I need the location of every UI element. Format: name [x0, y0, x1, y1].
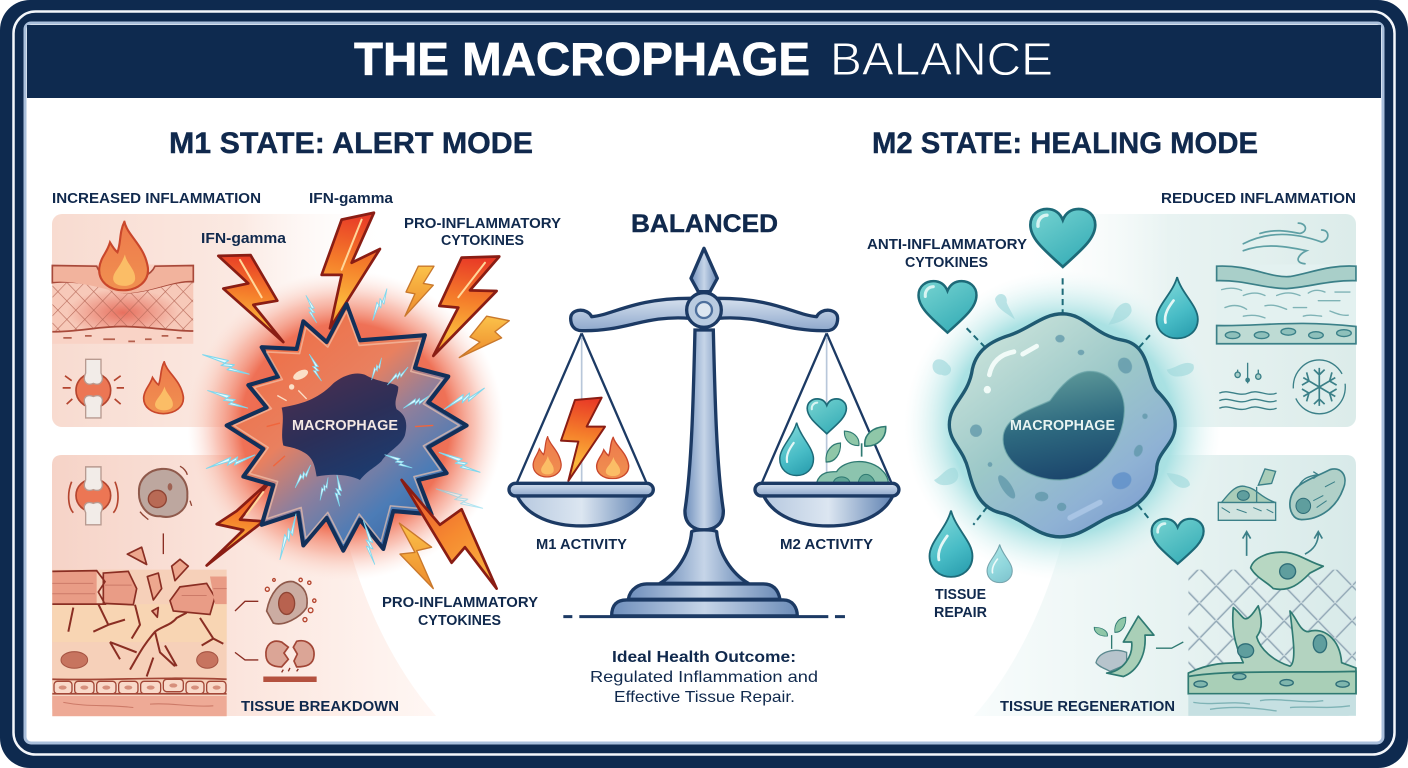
outer sparks — [201, 287, 486, 565]
inner sparks — [293, 353, 430, 506]
bolt: top — [322, 213, 380, 328]
cracked tissue — [52, 533, 227, 716]
beam — [571, 298, 838, 331]
large lightning bolts — [207, 213, 499, 565]
ground line — [563, 612, 845, 621]
right pan — [755, 483, 899, 526]
heading: M2 state: M2 STATE: HEALING MODE — [872, 127, 1258, 160]
panel: tissue breakdown background — [52, 455, 436, 716]
icon: flame — [144, 362, 183, 414]
droplets — [930, 277, 1198, 583]
panel: reduced inflammation background — [1016, 214, 1356, 427]
bolt: upper left — [218, 255, 283, 342]
illustration: scaffold regeneration — [1188, 552, 1356, 716]
icon: M1 pan contents — [533, 398, 629, 481]
illustration: calm tissue with breeze — [1217, 223, 1356, 344]
macrophage glow — [187, 270, 504, 581]
label: pro-inflammatory cytokines bottom: PRO-INFLAMMATORY — [382, 595, 538, 611]
label: pro-inflammatory cytokines bottom — [382, 595, 538, 629]
left illustration set — [52, 213, 509, 716]
heading: M1 state: M1 STATE: ALERT MODE — [169, 127, 533, 160]
icon: sprout with growth arrow — [1094, 616, 1183, 677]
macrophage cell: M2 state — [949, 314, 1175, 537]
base — [612, 530, 797, 616]
icon: damaged joint — [69, 467, 118, 525]
label: anti-inflammatory cytokines — [867, 237, 1027, 271]
label: anti-inflammatory cytokines: CYTOKINES — [905, 255, 988, 271]
label: M1 activity: M1 ACTIVITY — [536, 537, 627, 553]
macrophage glow — [904, 270, 1221, 581]
label: anti-inflammatory cytokines: ANTI-INFLAMMATORY — [867, 237, 1027, 253]
icon: cooling waves — [1219, 363, 1277, 409]
left pan — [509, 483, 653, 526]
text: ideal health outcome — [590, 649, 818, 706]
label: pro-inflammatory cytokines bottom: CYTOKINES — [418, 613, 501, 629]
macrophage cell: spiky M1 state — [227, 304, 467, 551]
label: tissue repair: REPAIR — [934, 605, 988, 621]
label: IFN-gamma left: IFN-gamma — [201, 231, 287, 247]
small yellow bolts — [399, 266, 509, 589]
icon: inflamed joint — [63, 359, 124, 418]
label: increased inflammation: INCREASED INFLAMMATION — [52, 191, 261, 207]
label: tissue repair: TISSUE — [935, 587, 986, 603]
lightning bolt: lower right — [402, 480, 497, 589]
bolt: upper right — [433, 257, 499, 356]
hearts — [919, 209, 1204, 564]
arrows — [1243, 532, 1322, 556]
title banner: THE MACROPHAGE — [354, 33, 810, 85]
hanger lines — [582, 337, 827, 483]
title banner: BALANCE — [830, 33, 1053, 85]
connector dashes — [967, 278, 1150, 525]
spire — [691, 248, 717, 292]
label: pro-inflammatory cytokines top: CYTOKINES — [441, 233, 524, 249]
nucleus — [1003, 371, 1124, 480]
left pan strings — [517, 333, 647, 483]
panel: tissue regeneration background — [974, 455, 1356, 716]
icon: damaged cell — [139, 466, 192, 520]
hub — [687, 293, 721, 327]
icon: stressed cell — [235, 578, 316, 624]
right illustration set — [904, 209, 1356, 716]
text: ideal health outcome: Effective Tissue Repair. — [614, 689, 795, 706]
label: IFN-gamma top: IFN-gamma — [309, 191, 394, 207]
right pan strings — [762, 333, 892, 483]
label: tissue repair — [934, 587, 988, 621]
illustration: cell repair icons — [1218, 469, 1345, 520]
label: pro-inflammatory cytokines top: PRO-INFLAMMATORY — [404, 216, 561, 232]
balance scale — [509, 248, 899, 617]
label: tissue breakdown: TISSUE BREAKDOWN — [241, 699, 399, 715]
column — [685, 330, 723, 530]
text: ideal health outcome: Ideal Health Outcome: — [612, 649, 796, 666]
title banner — [27, 25, 1381, 98]
soft secretion blobs — [933, 294, 1194, 488]
nucleus — [282, 373, 406, 480]
label: macrophage right: MACROPHAGE — [1010, 418, 1115, 434]
bolt highlights — [240, 220, 485, 514]
icon: ruptured cell — [235, 641, 317, 679]
icon: M2 pan contents — [780, 399, 888, 483]
label: tissue regeneration: TISSUE REGENERATION — [1000, 699, 1175, 715]
icon: snowflake — [1293, 360, 1345, 414]
label: pro-inflammatory cytokines top — [404, 216, 561, 249]
illustration: inflamed skin with flame — [52, 222, 193, 344]
panel: increased inflammation background — [52, 214, 392, 427]
balance heading: BALANCED — [631, 210, 778, 238]
label: M2 activity: M2 ACTIVITY — [780, 537, 873, 553]
label: reduced inflammation: REDUCED INFLAMMATION — [1161, 191, 1356, 207]
bolt: lower left — [207, 479, 272, 565]
label: macrophage left: MACROPHAGE — [292, 418, 398, 434]
text: ideal health outcome: Regulated Inflammation and — [590, 669, 818, 686]
